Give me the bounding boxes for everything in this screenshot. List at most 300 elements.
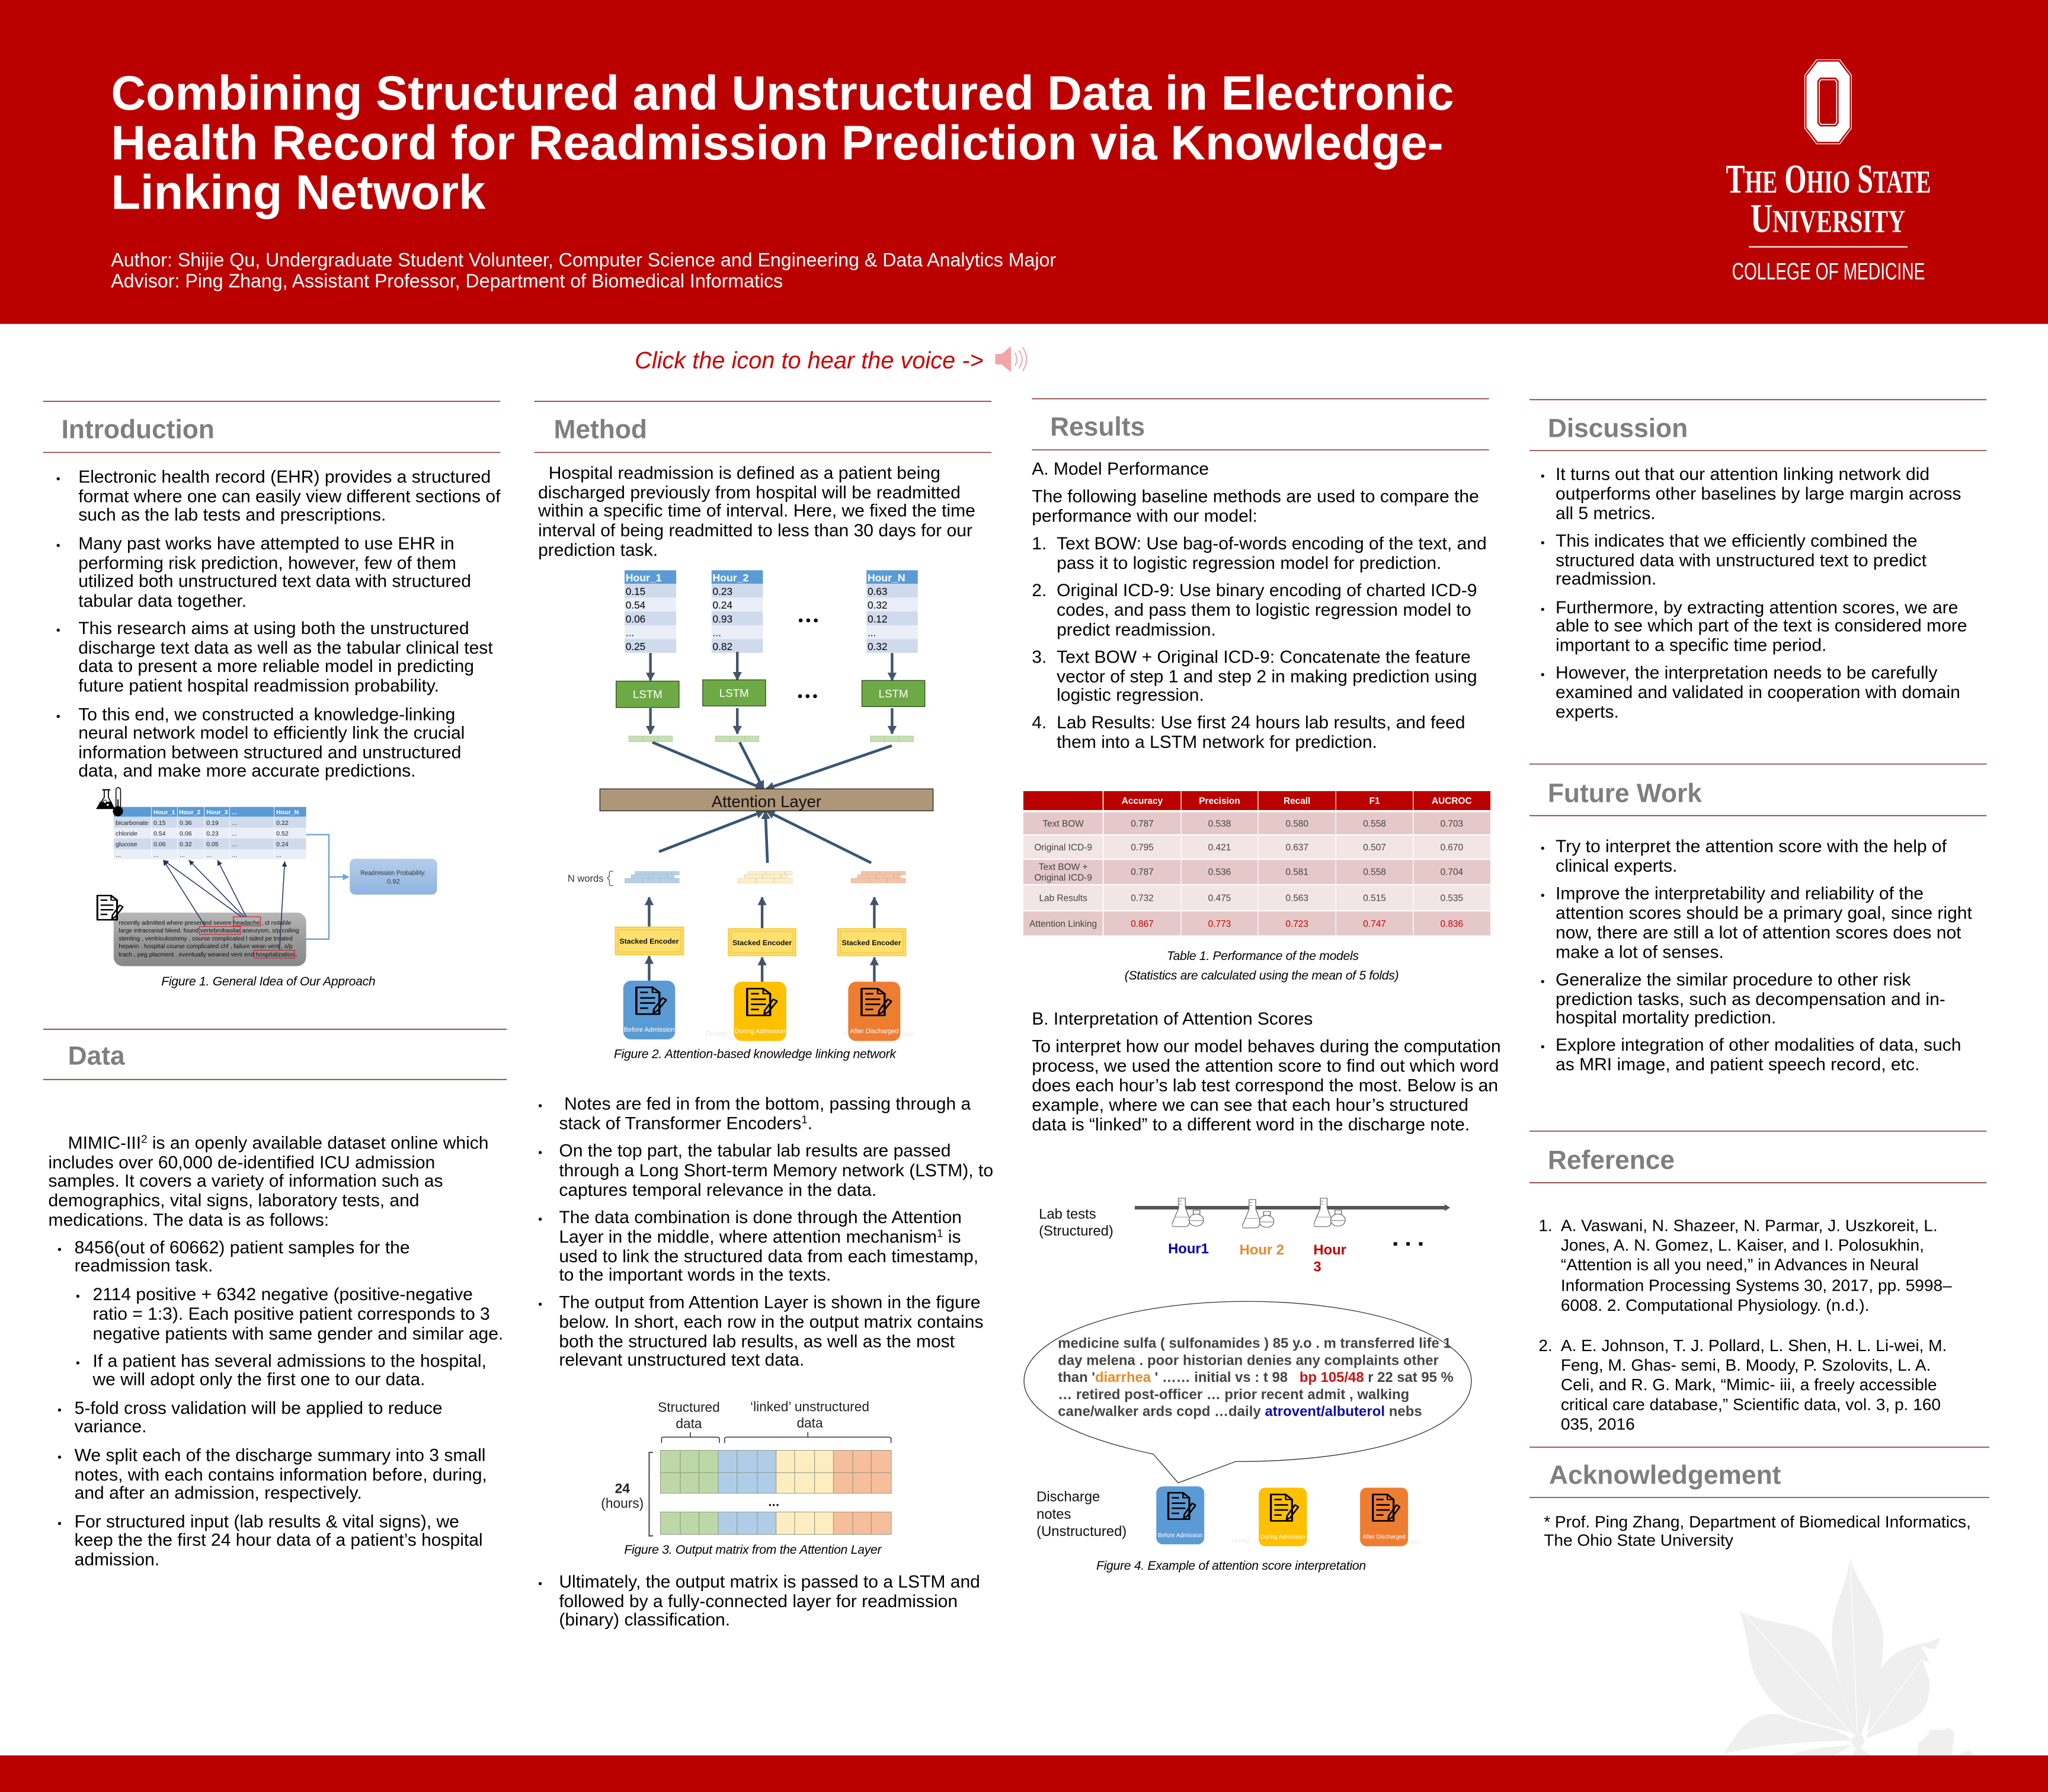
note boxes: rged: [1408, 1539, 1420, 1545]
matrix labels: data: [676, 1416, 702, 1431]
lab table: Hour_3: [206, 809, 228, 816]
discussion bullets: experts.: [1556, 702, 1619, 722]
hour columns: 0.15: [626, 585, 645, 597]
lab table: ...: [232, 809, 237, 816]
lab table: ...: [206, 852, 212, 859]
table 1: performance: 0.703: [1441, 819, 1463, 829]
lab table: 0.24: [276, 841, 289, 848]
future work bullets: clinical experts.: [1556, 856, 1677, 876]
N words label: [568, 871, 613, 885]
author and advisor: [111, 249, 1056, 292]
hour labels: Hour 2: [1240, 1242, 1284, 1258]
final method bullet: (binary) classification.: [559, 1610, 730, 1630]
table caption: [1125, 949, 1399, 983]
table 1: performance: AUCROC: [1432, 796, 1472, 807]
stacked encoders: Stacked Encoder: [732, 939, 792, 947]
reference list: 6008. 2. Computational Physiology. (n.d.).: [1561, 1296, 1869, 1314]
hour labels: [1168, 1241, 1346, 1275]
table 1: performance: 0.563: [1285, 893, 1308, 903]
lab table: 0.15: [153, 820, 166, 827]
panel: results: [1023, 399, 1501, 1135]
attention layer: [600, 789, 933, 811]
interpretation text: [1032, 1009, 1501, 1135]
table 1: performance: 0.536: [1208, 868, 1231, 878]
introduction bullets: such as the lab tests and prescriptions.: [78, 505, 386, 524]
discussion bullets: •: [1541, 536, 1545, 549]
encoder arrows: [649, 897, 874, 982]
acknowledgement text: The Ohio State University: [1544, 1531, 1733, 1550]
future work bullets: Try to interpret the attention score with the help of: [1556, 837, 1947, 856]
hour columns: ...: [868, 626, 876, 638]
discussion bullets: It turns out that our attention linking network did: [1556, 465, 1929, 484]
discussion bullets: •: [1541, 470, 1545, 483]
icon: note: [97, 895, 123, 920]
model performance text: logistic regression.: [1057, 685, 1204, 705]
data paragraph: [49, 1133, 488, 1230]
lab table: ...: [180, 852, 185, 859]
introduction bullets: utilized both unstructured text data with structured: [78, 572, 471, 591]
figure 2: attention-based knowledge linking network: [568, 570, 933, 1061]
method bullets: captures temporal relevance in the data.: [559, 1180, 876, 1200]
matrix cells: [660, 1450, 891, 1534]
speech bubble: [1024, 1301, 1471, 1483]
table 1: performance: 0.535: [1441, 893, 1463, 903]
caption: figure 1: Figure 1. General Idea of Our Approach: [161, 975, 376, 988]
hour columns: 0.24: [713, 599, 732, 611]
method bullets: stack of Transformer Encoders: [559, 1113, 801, 1133]
logo: The Ohio State University College of Medicine: UNIVERSITY: [1751, 196, 1905, 241]
discharge note text: [1058, 1336, 1454, 1420]
lab table: 0.22: [276, 820, 289, 827]
table 1: performance: 0.580: [1285, 819, 1308, 829]
data paragraph: demographics, vital signs, laboratory tests, and: [49, 1191, 420, 1210]
matrix labels: data: [796, 1415, 823, 1431]
model performance text: 4.: [1032, 713, 1047, 732]
panel: reference: [1529, 1131, 1986, 1433]
method paragraph: [537, 463, 975, 560]
lab table: Hour_1: [153, 809, 175, 816]
introduction bullets: •: [56, 472, 60, 485]
future work bullets: •: [1541, 975, 1545, 988]
discharge notes label: Discharge: [1036, 1489, 1100, 1505]
matrix labels: Structured: [658, 1400, 720, 1415]
table 1: performance: Accuracy: [1122, 796, 1163, 807]
discharge note text: than 'diarrhea ' …… initial vs : t 98 bp 105/48 r 22 sat 95 %: [1058, 1369, 1454, 1385]
note boxes: [1156, 1486, 1420, 1546]
timeline arrow: [1135, 1204, 1450, 1211]
table 1: performance: Attention Linking: [1029, 919, 1097, 929]
discussion bullets: [1541, 465, 1967, 722]
flask icons: [1172, 1198, 1345, 1228]
lab table: 0.32: [180, 841, 192, 848]
data paragraph: MIMIC-III: [68, 1133, 141, 1153]
table 1: performance: 0.704: [1441, 868, 1464, 878]
method bullets: Notes are fed in from the bottom, passing through a: [564, 1094, 971, 1113]
introduction bullets: discharge text data as well as the tabular clinical test: [78, 638, 493, 658]
introduction bullets: •: [56, 624, 60, 637]
introduction bullets: data, and make more accurate predictions.: [78, 761, 415, 780]
table 1: performance: Text BOW +: [1039, 862, 1087, 872]
method paragraph: prediction task.: [538, 540, 658, 560]
introduction bullets: This research aims at using both the unstructured: [78, 619, 469, 638]
panel: future work: [1529, 764, 1986, 1074]
discussion bullets: outperforms other baselines by large margin across: [1556, 484, 1961, 504]
table 1: performance: Lab Results: [1039, 893, 1087, 903]
discharge note text: … retired post-officer … prior recent admit , walking: [1058, 1387, 1409, 1403]
method bullets: On the top part, the tabular lab results are passed: [559, 1141, 951, 1161]
table 1: performance: Text BOW: [1042, 819, 1084, 829]
lab table: ...: [232, 820, 237, 827]
hour columns: 0.63: [868, 585, 887, 597]
lab table: 0.23: [206, 830, 219, 837]
heading: data: Data: [68, 1041, 125, 1070]
table 1: performance: 0.421: [1208, 843, 1231, 853]
data bullets: ratio = 1:3). Each positive patient corresponds to 3: [92, 1304, 490, 1324]
heading: reference: Reference: [1548, 1146, 1675, 1175]
reference list: 1.: [1538, 1216, 1553, 1234]
matrix labels: 24: [615, 1480, 630, 1496]
discussion bullets: readmission.: [1556, 569, 1656, 588]
readmission probability box: Readmission Probability:: [360, 870, 426, 877]
discussion bullets: •: [1541, 603, 1545, 616]
lab table: 0.06: [180, 830, 192, 837]
grey note box: recently admitted where presented severe headache , ct notable: [119, 920, 292, 926]
data bullets: readmission task.: [75, 1256, 213, 1276]
method bullets: through a Long Short-term Memory network (LSTM), to: [559, 1161, 993, 1180]
introduction bullets: information between structured and unstructured: [78, 743, 461, 762]
introduction bullets: Electronic health record (EHR) provides a structured: [78, 467, 491, 487]
table 1: performance: 0.732: [1131, 893, 1154, 903]
data bullets: we will adopt only the first one to our data.: [92, 1369, 425, 1389]
model performance text: predict readmission.: [1057, 620, 1216, 639]
note boxes: before, during, after: [623, 981, 914, 1041]
table 1: performance: 0.773: [1208, 919, 1231, 929]
data bullets: keep the the first 24 hour data of a patient’s hospital: [75, 1531, 483, 1550]
lab table: Hour_N: [276, 809, 299, 816]
lab table: 0.05: [206, 841, 219, 848]
model performance text: 2.: [1032, 581, 1047, 600]
introduction bullets: [56, 467, 501, 780]
future work bullets: as MRI image, and patient speech record, etc.: [1556, 1055, 1919, 1074]
reference list: A. Vaswani, N. Shazeer, N. Parmar, J. Uszkoreit, L.: [1561, 1216, 1938, 1234]
reference list: Celi, and R. G. Mark, “Mimic- iii, a freely accessible: [1561, 1375, 1937, 1394]
table 1: performance: 0.795: [1131, 843, 1154, 853]
header banner: [0, 0, 2048, 324]
reference list: 035, 2016: [1561, 1415, 1635, 1433]
author and advisor: Advisor: Ping Zhang, Assistant Professor, Department of Biomedical Informatics: [111, 270, 783, 292]
reference list: [1538, 1216, 1952, 1433]
matrix labels: (hours): [601, 1496, 644, 1511]
panel: introduction: [43, 401, 501, 780]
future work bullets: Explore integration of other modalities of data, such: [1556, 1035, 1961, 1055]
figure 2: attention-based knowledge linking network: LSTM: [719, 687, 749, 699]
hour labels: Hour: [1313, 1242, 1346, 1258]
reference list: 2.: [1538, 1336, 1553, 1355]
introduction bullets: performing risk prediction, however, few of them: [78, 553, 456, 573]
hour columns: Hour_1: [626, 572, 662, 584]
hour columns: 0.82: [713, 641, 732, 652]
lab table: ...: [276, 852, 281, 859]
method bullets: 1: [801, 1113, 808, 1126]
lab tests label: Lab tests: [1039, 1206, 1096, 1222]
data paragraph: is an openly available dataset online which: [147, 1133, 488, 1153]
future work bullets: Improve the interpretability and reliability of the: [1556, 884, 1924, 904]
heading: method: Method: [554, 415, 647, 444]
table 1: performance: 0.747: [1363, 919, 1386, 929]
hour columns: Hour_N: [868, 572, 905, 584]
discharge note text: cane/walker ards copd …daily atrovent/albuterol nebs: [1058, 1404, 1422, 1420]
introduction bullets: To this end, we constructed a knowledge-linking: [78, 705, 455, 725]
hour columns: 0.54: [626, 599, 646, 611]
model performance text: Text BOW + Original ICD-9: Concatenate the feature: [1057, 648, 1471, 667]
heading: acknowledgement: Acknowledgement: [1549, 1461, 1781, 1490]
model performance text: The following baseline methods are used to compare the: [1032, 487, 1479, 506]
table 1: performance: 0.867: [1131, 919, 1154, 929]
method bullets: relevant unstructured text data.: [559, 1350, 804, 1369]
method bullets: to the important words in the texts.: [559, 1265, 831, 1285]
interpretation text: data is “linked” to a different word in the discharge note.: [1032, 1115, 1470, 1135]
note boxes: Before Admission: [1158, 1532, 1203, 1539]
LSTM arrows: [651, 652, 892, 734]
author and advisor: Author: Shijie Qu, Undergraduate Student Volunteer, Computer Science and Engineering & Data Analytics Major: [111, 249, 1056, 271]
model performance text: Original ICD-9: Use binary encoding of charted ICD-9: [1057, 581, 1477, 600]
interpretation text: process, we used the attention score to find out which word: [1032, 1056, 1499, 1076]
grey note box: large intracranial bleed. found vertebrobasilar aneurysm, s/p coiling: [119, 928, 299, 935]
word stacks: [625, 871, 905, 883]
introduction bullets: data to present a more reliable model in predicting: [78, 657, 474, 676]
introduction bullets: tabular data together.: [78, 591, 247, 611]
panel: method: [534, 401, 991, 560]
table 1: performance: Precision: [1199, 796, 1240, 807]
future work bullets: •: [1541, 889, 1545, 903]
hour labels: Hour1: [1168, 1241, 1209, 1257]
data bullets: •: [76, 1357, 80, 1370]
hour columns: Hour_2: [713, 572, 748, 584]
lab table: bicarbonate: [116, 820, 148, 827]
introduction bullets: future patient hospital readmission probability.: [78, 676, 439, 696]
model performance text: performance with our model:: [1032, 507, 1257, 526]
introduction bullets: •: [56, 711, 60, 724]
heading: future work: Future Work: [1548, 779, 1702, 808]
reference list: Feng, M. Ghas- semi, B. Moody, P. Szolovits, L. A.: [1561, 1356, 1931, 1374]
future work bullets: Generalize the similar procedure to other risk: [1556, 970, 1911, 990]
note boxes: before, during, after: During Admission: [735, 1028, 786, 1035]
caption: figure 3: Figure 3. Output matrix from the Attention Layer: [624, 1543, 882, 1557]
grey note box: heparin . hospital course complicated chf , failure wean vent , s/p: [119, 943, 293, 950]
icon: flask and thermometer: [97, 788, 123, 817]
table caption: (Statistics are calculated using the mean of 5 folds): [1125, 969, 1399, 983]
hour columns: [625, 570, 918, 653]
table 1: performance: 0.515: [1363, 893, 1386, 903]
lab table: 0.19: [206, 820, 219, 827]
method bullets: both the structured lab results, as well as the most: [559, 1332, 955, 1352]
method bullets: is: [943, 1227, 961, 1247]
table 1: performance: 0.787: [1131, 868, 1154, 878]
table 1: performance: 0.581: [1285, 868, 1308, 878]
background leaf watermark: [1723, 1556, 1975, 1755]
method bullets: •: [538, 1147, 542, 1160]
introduction bullets: •: [56, 539, 60, 552]
hour columns: 0.25: [626, 641, 645, 652]
hour columns: 0.32: [868, 641, 887, 652]
data bullets: [57, 1238, 503, 1570]
table 1: performance: 0.723: [1285, 919, 1308, 929]
method bullets: •: [538, 1099, 542, 1112]
data bullets: variance.: [75, 1417, 146, 1436]
data bullets: For structured input (lab results & vital signs), we: [75, 1512, 459, 1532]
discharge notes label: (Unstructured): [1036, 1524, 1127, 1540]
voice prompt: Click the icon to hear the voice ->: [635, 348, 984, 374]
discharge note text: day melena . poor historian denies any complaints other: [1058, 1353, 1439, 1369]
title: Combining Structured and Unstructured Data in Electronic: [111, 66, 1454, 120]
final method bullet: followed by a fully-connected layer for readmission: [559, 1592, 958, 1611]
method bullets: •: [538, 1213, 542, 1226]
table 1: performance: Original ICD-9: [1034, 843, 1092, 853]
acknowledgement text: [1544, 1513, 1971, 1550]
table 1: performance: 0.507: [1363, 843, 1386, 853]
table 1: performance: 0.538: [1208, 819, 1231, 829]
table caption: Table 1. Performance of the models: [1167, 949, 1359, 963]
heading: introduction: Introduction: [62, 415, 215, 444]
model performance text: [1032, 459, 1487, 752]
data bullets: negative patients with same gender and similar age.: [92, 1324, 503, 1343]
data bullets: and after an admission, respectively.: [75, 1483, 362, 1503]
lab tests label: [1039, 1206, 1113, 1239]
final method bullet: •: [538, 1577, 542, 1591]
lab table: Hour_2: [179, 809, 200, 816]
model performance text: them into a LSTM network for prediction.: [1057, 732, 1377, 752]
data bullets: We split each of the discharge summary into 3 small: [75, 1445, 485, 1465]
future work bullets: [1541, 837, 1972, 1074]
brackets: [661, 1432, 891, 1443]
hour columns: 0.32: [868, 599, 887, 611]
method bullets: used to link the structured data from each timestamp,: [559, 1247, 978, 1266]
lab table: 0.36: [180, 820, 192, 827]
note boxes: before, during, after: A: [843, 1029, 848, 1038]
model performance text: A. Model Performance: [1032, 459, 1209, 479]
method bullets: Layer in the middle, where attention mechanism: [559, 1227, 937, 1247]
discussion bullets: However, the interpretation needs to be carefully: [1556, 663, 1937, 683]
connector to prediction: [306, 834, 348, 939]
acknowledgement text: * Prof. Ping Zhang, Department of Biomedical Informatics,: [1544, 1513, 1971, 1531]
hour columns: ...: [713, 626, 721, 638]
hour columns: 0.12: [868, 613, 887, 625]
title: Linking Network: [111, 166, 486, 220]
note boxes: During: [1231, 1538, 1249, 1544]
hour columns: ...: [626, 626, 634, 638]
grey note box: [114, 913, 306, 966]
introduction bullets: format where one can easily view different sections of: [78, 487, 501, 506]
lab table: ...: [232, 841, 237, 848]
discharge notes label: [1036, 1489, 1127, 1540]
N words label: N words: [568, 873, 603, 884]
future work bullets: make a lot of senses.: [1556, 943, 1724, 962]
panel: discussion: [1529, 399, 1986, 722]
discussion bullets: examined and validated in cooperation with domain: [1556, 683, 1960, 702]
method bullets: The output from Attention Layer is shown in the figure: [559, 1292, 981, 1312]
future work bullets: attention scores should be a primary goal, since right: [1556, 904, 1972, 923]
readmission probability box: 0.92: [387, 878, 400, 885]
stacked encoders: [616, 927, 905, 956]
table 1: performance: 0.670: [1441, 843, 1463, 853]
matrix labels: ‘linked’ unstructured: [750, 1399, 869, 1415]
icon: speaker: [996, 346, 1026, 372]
model performance text: codes, and pass them to logistic regression model to: [1057, 600, 1471, 620]
discussion bullets: structured data with unstructured text to predict: [1556, 551, 1927, 570]
data bullets: admission.: [75, 1550, 159, 1570]
table 1: performance: 0.558: [1363, 819, 1386, 829]
method bullets: 1: [937, 1227, 943, 1239]
data paragraph: includes over 60,000 de-identified ICU admission: [49, 1153, 435, 1173]
model performance text: Lab Results: Use first 24 hours lab results, and feed: [1057, 713, 1465, 732]
note boxes: After Discharged: [1363, 1534, 1406, 1540]
figure 2: attention-based knowledge linking network: LSTM: [879, 687, 908, 700]
logo: The Ohio State University College of Medicine: [1726, 59, 1931, 285]
future work bullets: prediction tasks, such as decompensation and in-: [1556, 990, 1945, 1009]
reference list: critical care database,” Scientific data, vol. 3, p. 160: [1561, 1395, 1941, 1413]
LSTM boxes: [616, 680, 925, 708]
discussion bullets: able to see which part of the text is considered more: [1556, 616, 1967, 636]
introduction bullets: neural network model to efficiently link the crucial: [78, 723, 465, 743]
data bullets: 8456(out of 60662) patient samples for the: [75, 1238, 410, 1257]
future work bullets: hospital mortality prediction.: [1556, 1008, 1776, 1028]
lab table: [114, 807, 306, 859]
future work bullets: •: [1541, 1041, 1545, 1054]
model performance text: vector of step 1 and step 2 in making prediction using: [1057, 667, 1477, 687]
discussion bullets: Furthermore, by extracting attention scores, we are: [1556, 598, 1958, 617]
title: [111, 66, 1454, 220]
readmission probability box: [350, 859, 437, 894]
discharge notes label: notes: [1036, 1506, 1071, 1522]
lab table: 0.54: [153, 830, 166, 837]
table 1: performance: F1: [1369, 796, 1380, 807]
reference list: “Attention is all you need,” in Advances in Neural: [1561, 1255, 1919, 1273]
hour labels: 3: [1313, 1259, 1321, 1275]
matrix labels: ...: [768, 1493, 779, 1509]
caption: figure 4: Figure 4. Example of attention score interpretation: [1096, 1559, 1366, 1573]
method paragraph: within a specific time of interval. Here, we fixed the time: [537, 501, 975, 521]
continuation dots: [1394, 1242, 1422, 1246]
discussion bullets: important to a specific time period.: [1556, 636, 1826, 655]
method bullets: .: [808, 1113, 812, 1133]
future work bullets: •: [1541, 842, 1545, 855]
lab table: ...: [153, 852, 159, 859]
discussion bullets: all 5 metrics.: [1556, 504, 1656, 523]
table 1: performance: 0.637: [1285, 843, 1308, 853]
table 1: performance: [1023, 791, 1490, 936]
figure 2: attention-based knowledge linking network: LSTM: [633, 688, 663, 700]
data bullets: 2114 positive + 6342 negative (positive-negative: [92, 1285, 473, 1304]
lab table: 0.06: [153, 841, 166, 848]
hour columns: 0.06: [626, 613, 645, 625]
hour columns: 0.93: [713, 613, 732, 625]
introduction bullets: Many past works have attempted to use EHR in: [78, 534, 455, 553]
table 1: performance: Recall: [1284, 796, 1310, 807]
hidden vector bars: [629, 736, 914, 742]
grey note box: stenting , ventriculostomy . course complicated l sided pe treated: [119, 936, 293, 942]
figure 4: attention score interpretation: [1024, 1198, 1471, 1573]
method paragraph: interval of being readmitted to less than 30 days for our: [538, 521, 972, 540]
matrix labels: [601, 1399, 869, 1511]
method bullets: The data combination is done through the Attention: [559, 1208, 962, 1227]
stacked encoders: Stacked Encoder: [842, 939, 901, 947]
lab table: chloride: [116, 830, 137, 837]
table 1: performance: 0.836: [1441, 919, 1463, 929]
data bullets: •: [57, 1243, 62, 1256]
discussion bullets: •: [1541, 668, 1545, 681]
note boxes: before, during, after: Before Admission: [624, 1026, 674, 1033]
model performance text: Text BOW: Use bag-of-words encoding of the text, and: [1057, 534, 1487, 553]
